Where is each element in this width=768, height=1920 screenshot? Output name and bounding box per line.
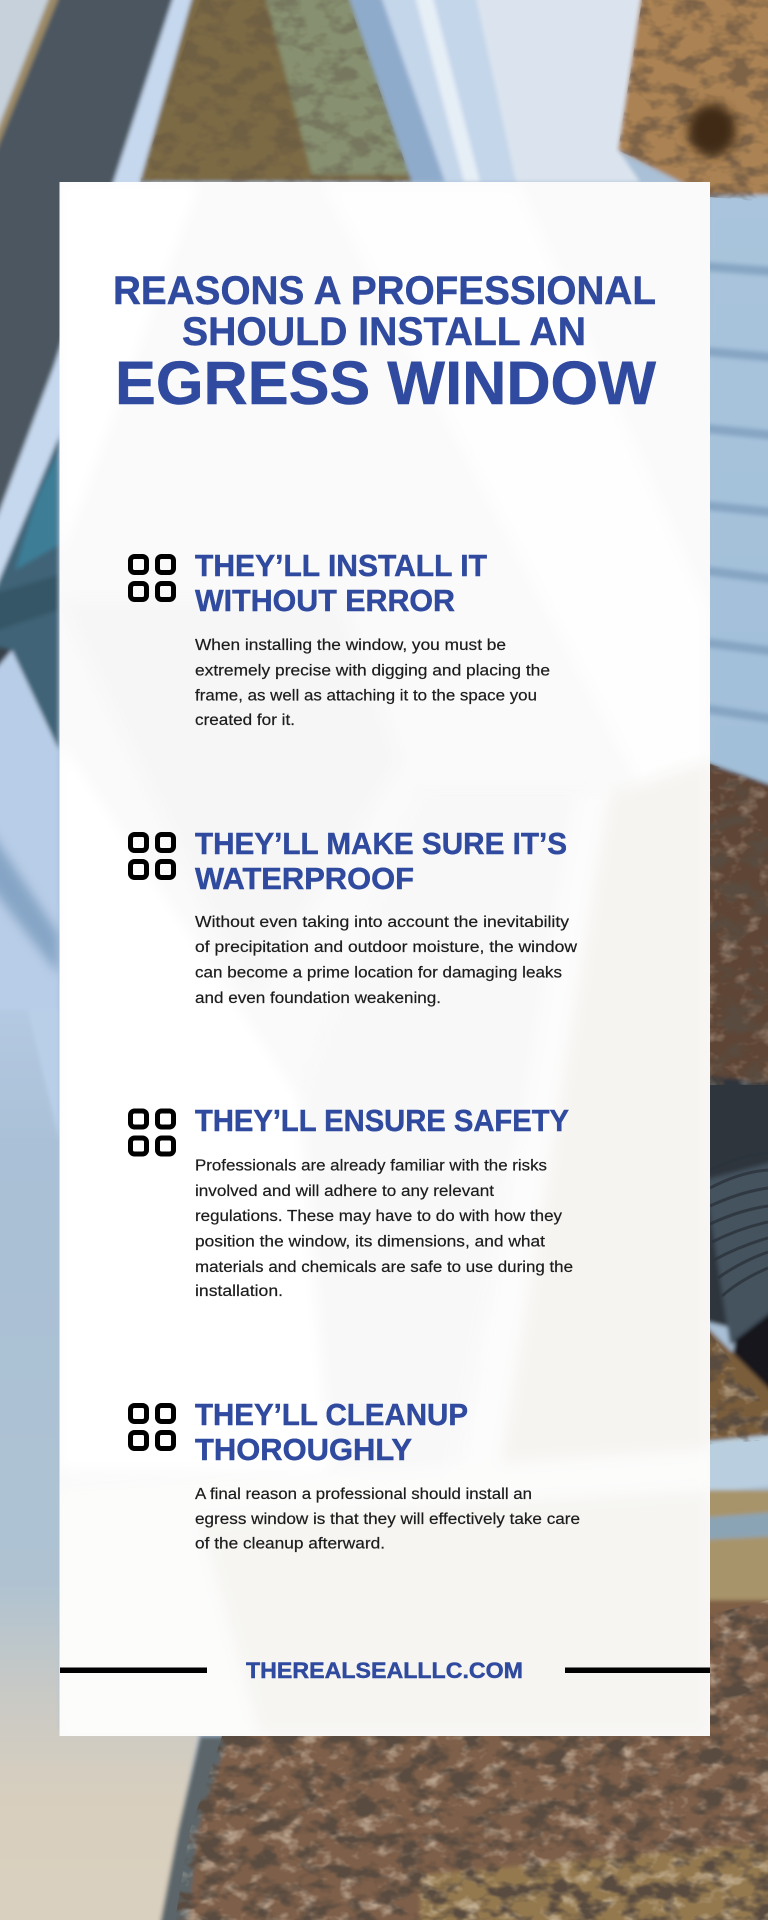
body text: section 4: A final reason a professional should install an [195,1486,532,1503]
icon: four rounded squares [130,556,174,600]
icon: four rounded squares [130,1111,174,1154]
body text: section 3: Professionals are already familiar with the risks [195,1158,547,1174]
heading: section 4: THOROUGHLY [195,1432,412,1467]
section 1: they'll install it without error [130,548,550,729]
body text: section 2 [195,914,578,1007]
body text: section 1: created for it. [195,712,295,729]
section 2: they'll make sure it's waterproof [130,826,578,1007]
body text: section 1: frame, as well as attaching it to the space you [195,688,537,704]
black pipe ribs [710,1153,768,1296]
panel photo ghosting [514,776,699,1452]
title [113,269,656,417]
heading: section 1: THEY’LL INSTALL IT [195,548,487,583]
body text: section 1: extremely precise with digging and placing the [195,662,550,680]
body text: section 2: of precipitation and outdoor moisture, the window [195,939,578,956]
icon: four rounded squares [130,1406,174,1448]
body text: section 4: egress window is that they will effectively take care [195,1511,580,1528]
body text: section 4 [195,1486,580,1552]
body text: section 3: position the window, its dimensions, and what [195,1234,546,1250]
section 3: they'll ensure safety [130,1103,573,1300]
heading: section 3: THEY’LL ENSURE SAFETY [195,1103,569,1138]
body text: section 3: installation. [195,1283,283,1300]
heading: section 4 [195,1397,468,1467]
body text: section 2: can become a prime location for damaging leaks [195,964,562,982]
icon: four rounded squares [130,834,174,878]
title: SHOULD INSTALL AN [182,310,586,354]
body text: section 2: Without even taking into account the inevitability [195,914,569,931]
heading: section 4: THEY’LL CLEANUP [195,1397,468,1432]
heading: section 2: WATERPROOF [195,861,414,896]
body text: section 3: materials and chemicals are safe to use during the [195,1259,573,1276]
body text: section 4: of the cleanup afterward. [195,1536,385,1552]
corrugated metal ribs [700,266,768,720]
section 4: they'll cleanup thoroughly [130,1397,580,1552]
title: REASONS A PROFESSIONAL [113,269,656,313]
body text: section 3: involved and will adhere to any relevant [195,1183,495,1200]
panel: main content card [60,182,710,1736]
heading: section 1 [195,548,487,618]
body text: section 2: and even foundation weakening. [195,990,441,1007]
body text: section 1 [195,637,550,729]
heading: section 2 [195,826,567,896]
body text: section 3: regulations. These may have to do with how they [195,1208,562,1225]
body text: section 3 [195,1158,573,1300]
website url: THEREALSEALLLC.COM [246,1658,523,1683]
footer: website with side rules [60,1658,710,1683]
body text: section 1: When installing the window, you must be [195,637,506,654]
title: EGRESS WINDOW [115,349,656,417]
heading: section 1: WITHOUT ERROR [195,583,455,618]
heading: section 2: THEY’LL MAKE SURE IT’S [195,826,567,861]
